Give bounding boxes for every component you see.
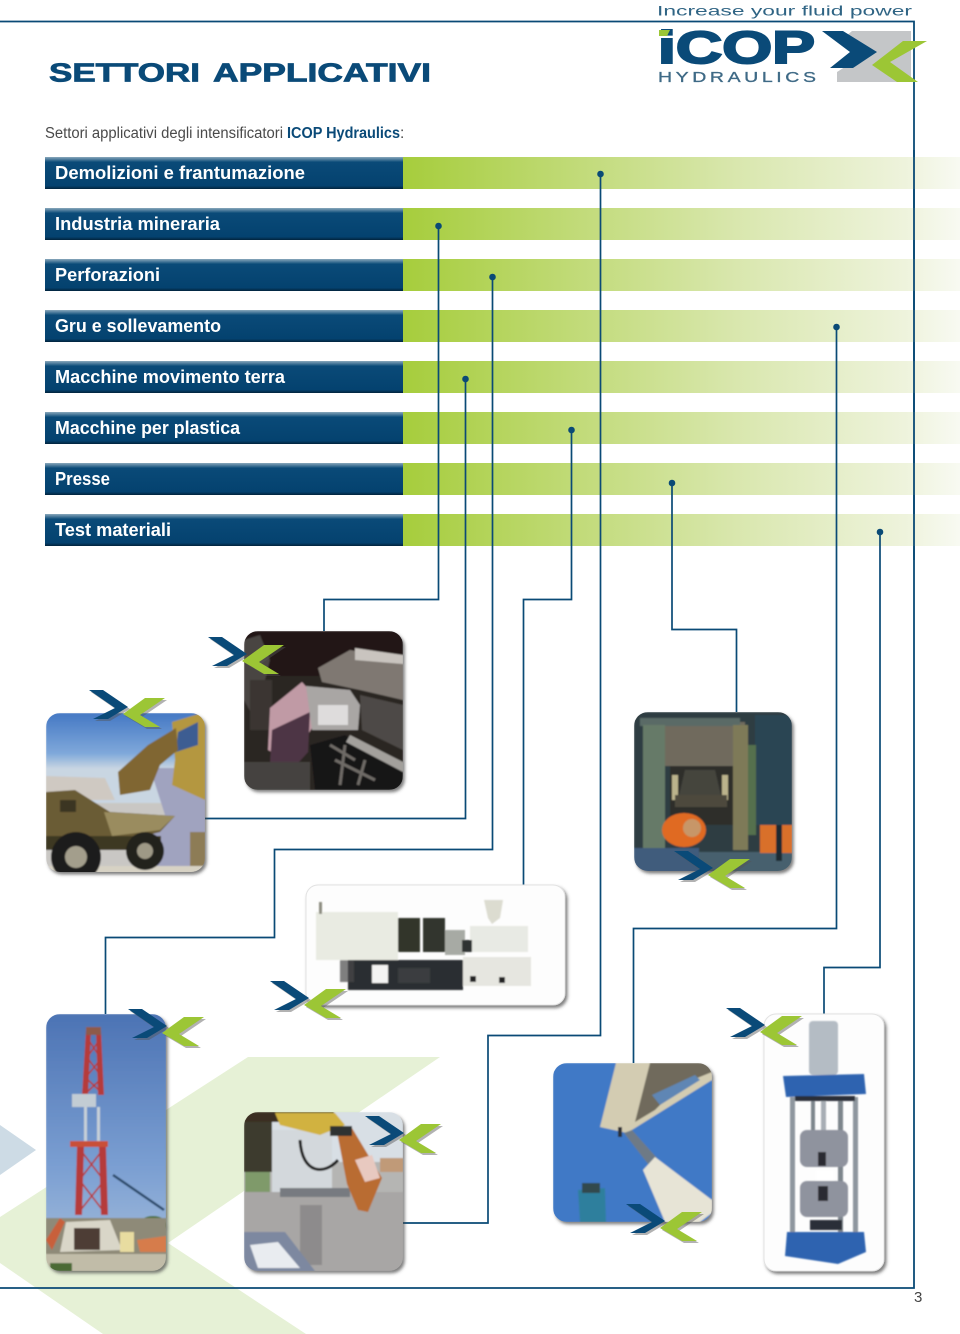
row: Macchine per plastica <box>45 412 960 444</box>
row: Perforazioni <box>45 259 960 291</box>
row: Macchine per plastica: Macchine per plastica <box>55 418 241 438</box>
page number: 3 <box>914 1289 922 1306</box>
photo: demolition breaker on concrete wall <box>244 1112 403 1271</box>
connector: Test materiali <box>824 532 880 1014</box>
tagline: Increase your fluid power <box>657 2 913 18</box>
connector: Demolizioni <box>403 174 600 1223</box>
photo: injection moulding machine <box>306 885 565 1005</box>
row: Demolizioni e frantumazione <box>45 157 960 189</box>
connector: Perforazioni <box>106 277 492 1014</box>
intro text: Settori applicativi degli intensificatori <box>45 125 283 142</box>
row: Test materiali <box>45 514 960 546</box>
logo: ICOP Hydraulics <box>658 22 927 85</box>
photo: forging press <box>634 712 792 872</box>
photo: crane boom against blue sky <box>553 1063 712 1222</box>
intro text: : <box>400 125 404 142</box>
icon: chevrons on demolition photo <box>365 1116 443 1155</box>
row: Macchine movimento terra <box>45 361 960 393</box>
row: Demolizioni e frantumazione: Demolizioni e frantumazione <box>55 163 305 183</box>
row: Macchine movimento terra: Macchine movimento terra <box>55 367 286 387</box>
icon: chevrons on truck photo <box>89 690 167 729</box>
connector: Macchine movimento terra <box>205 379 466 818</box>
title: SETTORI <box>49 58 200 88</box>
connector: Industria mineraria <box>324 226 438 631</box>
row: Industria mineraria <box>45 208 960 240</box>
intro text: ICOP Hydraulics <box>287 125 400 142</box>
connector: Macchine per plastica <box>524 430 572 885</box>
row: Presse: Presse <box>55 469 110 489</box>
icon: chevrons on plastics photo <box>270 981 348 1020</box>
row: Perforazioni: Perforazioni <box>55 265 160 285</box>
row: Test materiali: Test materiali <box>55 520 171 540</box>
connector dots <box>435 171 883 535</box>
photo: materials test machine <box>764 1014 884 1271</box>
icon: chevrons on test machine photo <box>726 1008 804 1047</box>
row: Gru e sollevamento <box>45 310 960 342</box>
row: Gru e sollevamento: Gru e sollevamento <box>55 316 221 336</box>
background triangle: pale blue <box>0 1125 36 1175</box>
icon: chevrons on rig photo <box>128 1009 206 1048</box>
row: Industria mineraria: Industria mineraria <box>55 214 221 234</box>
intro text <box>45 125 404 142</box>
photo: mining machine underground <box>244 631 403 790</box>
title: APPLICATIVI <box>213 58 431 88</box>
photo: drilling rig <box>46 1014 167 1271</box>
logo: ICOP Hydraulics: iCOP <box>658 22 815 73</box>
icon: chevrons on press photo <box>674 851 752 890</box>
title <box>49 58 431 88</box>
photo: earth-moving truck and excavator <box>46 712 205 882</box>
icon: chevrons on crane photo <box>626 1204 704 1243</box>
icon: chevrons on mine photo <box>208 637 286 676</box>
connector: Presse <box>672 483 736 712</box>
row: Presse <box>45 463 960 495</box>
frame segment over row ends <box>913 150 915 560</box>
background chevron: pale green <box>0 1057 440 1334</box>
connector: Gru e sollevamento <box>634 327 836 1063</box>
connectors <box>106 174 880 1223</box>
logo: ICOP Hydraulics: HYDRAULICS <box>658 68 816 85</box>
